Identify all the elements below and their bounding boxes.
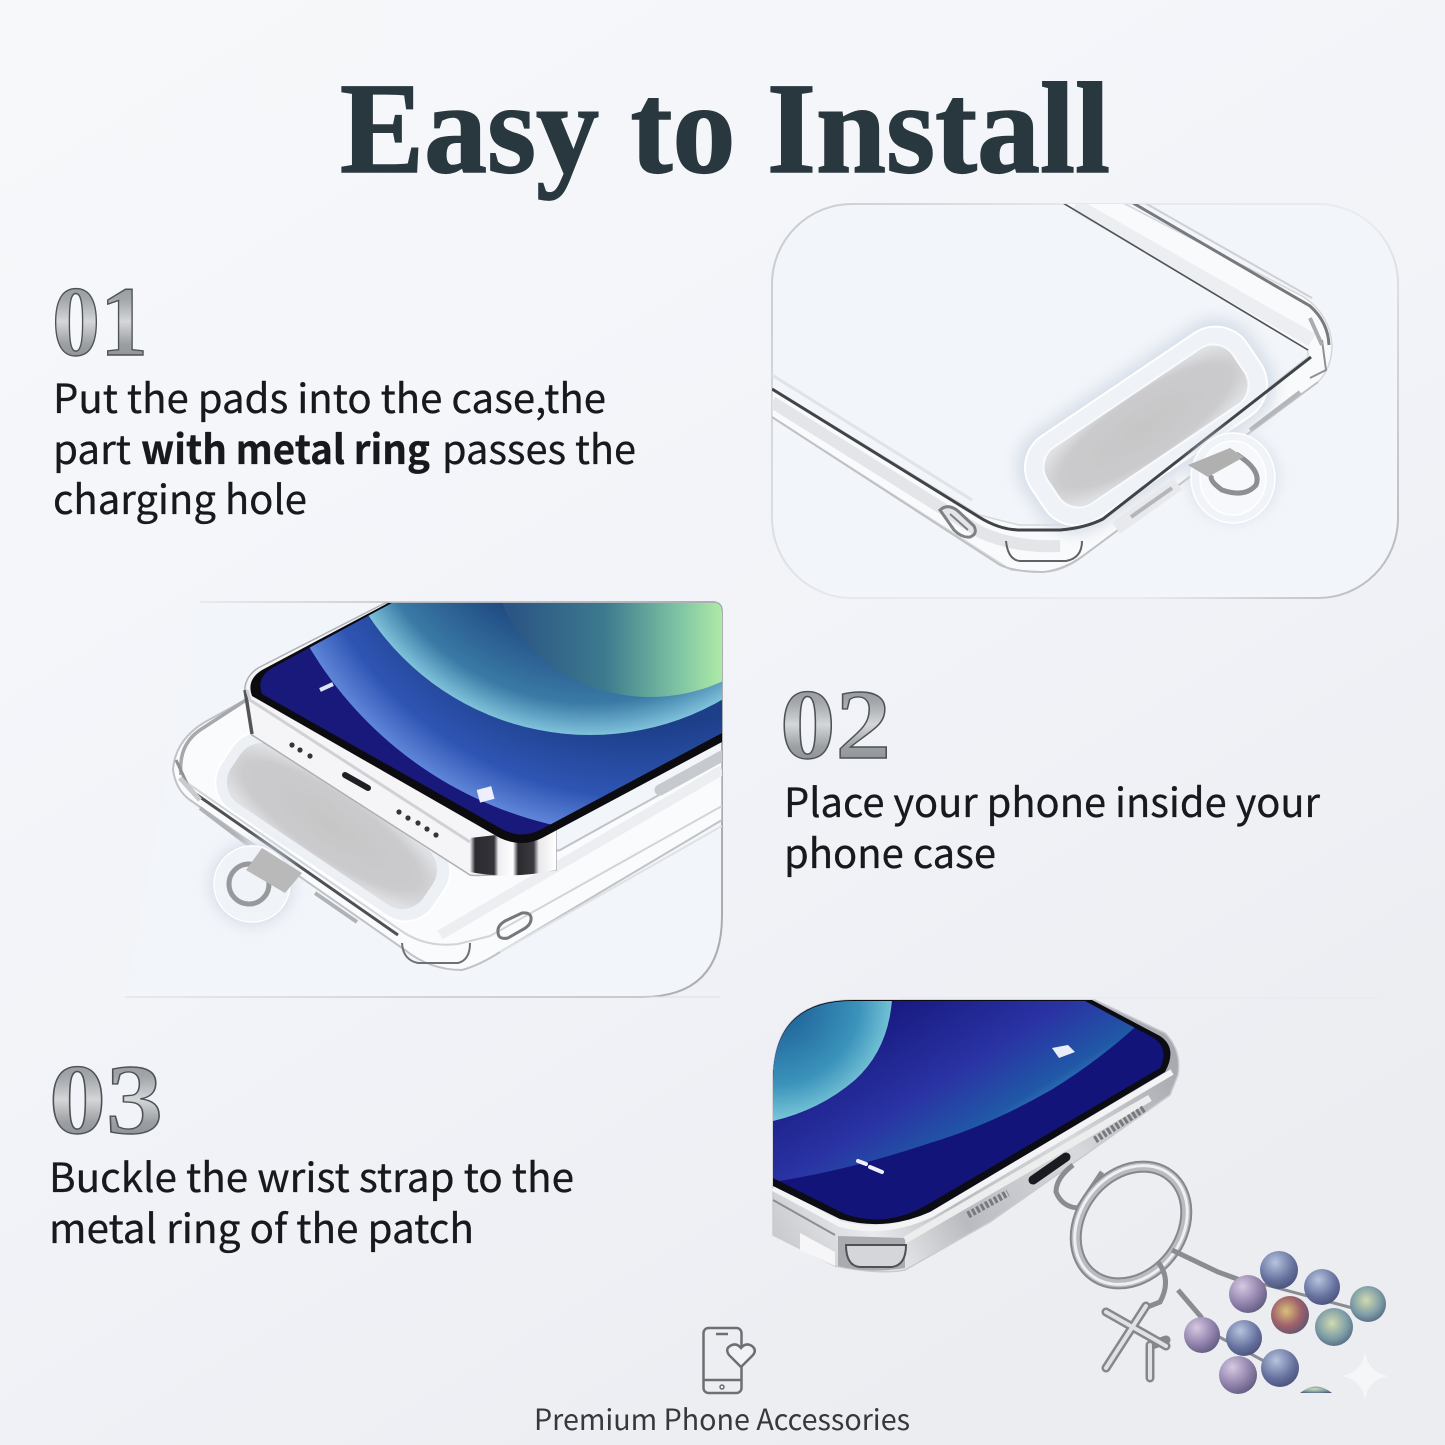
- adhesive pad: [216, 734, 450, 920]
- number 02: 02: [780, 669, 891, 780]
- adhesive pad with halo: [1014, 315, 1280, 538]
- instructions 02: [784, 771, 1320, 880]
- phone body: [243, 602, 608, 876]
- charm: balloon dog: [1106, 1306, 1166, 1378]
- brand name: Premium Phone Accessories: [534, 1397, 910, 1439]
- instructions 02: phone case: [784, 822, 996, 880]
- phone screen: [250, 603, 722, 843]
- clear case shell: [772, 203, 1332, 572]
- clear case edges: [176, 700, 722, 952]
- instructions 03: Buckle the wrist strap to the: [49, 1146, 574, 1204]
- instructions 02: Place your phone inside your: [784, 771, 1320, 829]
- instructions 01: charging hole: [53, 468, 307, 526]
- step 03 text block: [49, 1044, 574, 1255]
- phone bottom details: [289, 742, 722, 838]
- metal ring with halo: [1188, 433, 1277, 523]
- panel: strap attached: [770, 1000, 1386, 1394]
- step 01 text block: [52, 266, 636, 526]
- number 01: 01: [52, 266, 148, 377]
- panel: phone in case: [172, 601, 723, 998]
- faint divider lines: [125, 996, 720, 998]
- instructions 01: [53, 367, 636, 526]
- sparkle watermark: [1342, 1352, 1388, 1400]
- crystal beads: [1184, 1251, 1386, 1394]
- clear case shell: [173, 700, 722, 970]
- strap chain: [1145, 1250, 1360, 1375]
- metal ring with halo: [210, 842, 302, 926]
- title: Easy to Install: [340, 57, 1110, 201]
- volume and side buttons: [402, 913, 531, 963]
- phone in case: [773, 1000, 1179, 1272]
- number 03: 03: [49, 1044, 163, 1155]
- clear case edges: [772, 203, 1329, 572]
- instructions 01: part: [53, 418, 131, 476]
- carabiner ring: [1051, 1143, 1211, 1307]
- footer brand: [534, 1328, 910, 1439]
- instructions 01: with metal ring: [141, 418, 430, 476]
- instructions 01: passes the: [442, 418, 636, 476]
- phone screen: [770, 1000, 1170, 1230]
- step 02 text block: [780, 669, 1320, 880]
- panel: case with pad: [772, 203, 1398, 598]
- icon: phone with heart: [704, 1328, 755, 1393]
- volume and side buttons: [940, 392, 1300, 561]
- instructions 03: [49, 1146, 574, 1255]
- instructions 03: metal ring of the patch: [49, 1197, 474, 1255]
- instructions 01: Put the pads into the case,the: [53, 367, 606, 425]
